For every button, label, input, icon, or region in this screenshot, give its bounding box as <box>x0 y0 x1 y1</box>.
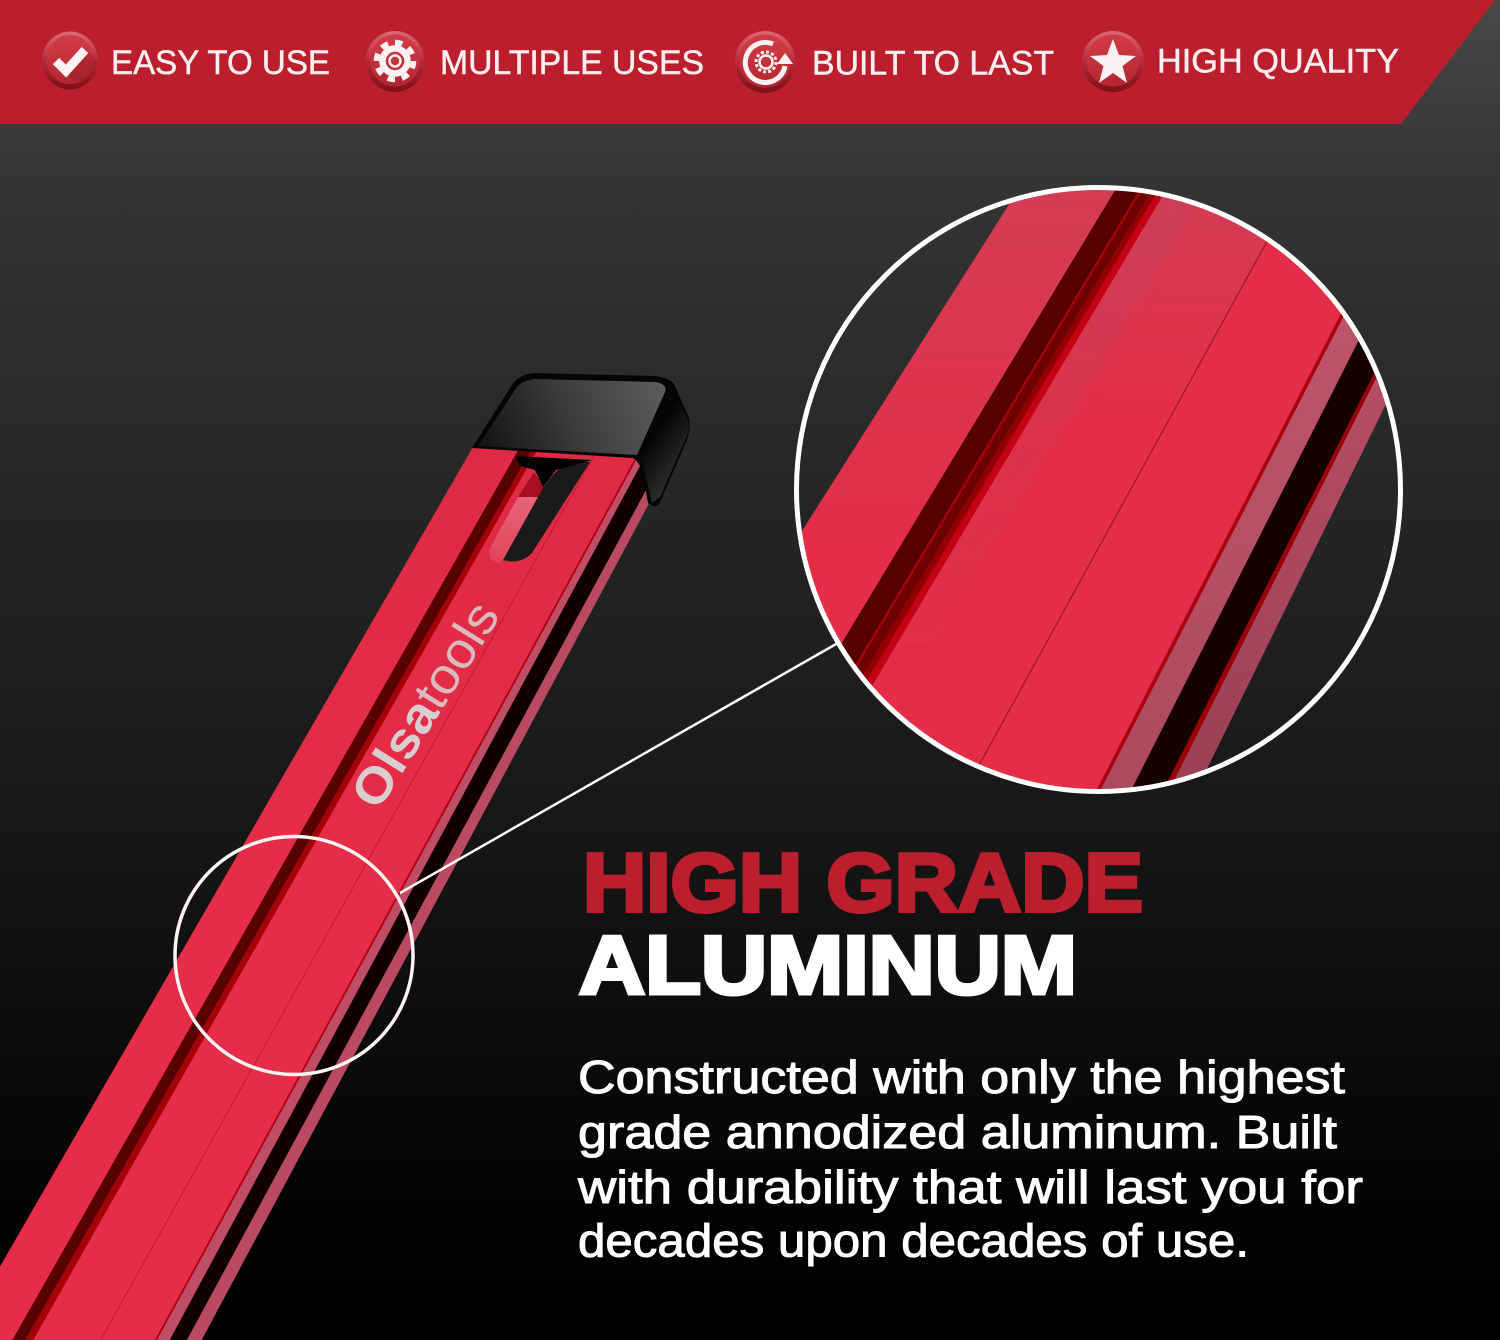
label: high quality: HIGH QUALITY <box>1157 42 1399 80</box>
label: built to last: BUILT TO LAST <box>812 44 1054 82</box>
icon: star badge <box>1082 31 1144 92</box>
body paragraph <box>577 1051 1363 1266</box>
bar main face <box>0 440 647 1340</box>
ghost slot reflection <box>489 497 538 563</box>
seam line <box>89 440 603 1340</box>
lens ring <box>796 188 1400 792</box>
icon: check badge <box>42 32 98 90</box>
small magnifier circle <box>175 836 413 1074</box>
body paragraph: decades upon decades of use. <box>578 1214 1249 1266</box>
heading <box>579 836 1143 1012</box>
bar light strip <box>146 440 654 1340</box>
body paragraph: with durability that will last you for <box>577 1161 1363 1213</box>
cap shadow <box>515 456 592 487</box>
lens contents <box>802 190 1386 789</box>
logo text: Olsatools <box>340 591 510 818</box>
label: easy to use: EASY TO USE <box>111 44 330 82</box>
heading line: aluminum: ALUMINUM <box>579 919 1077 1012</box>
black end cap <box>472 373 690 506</box>
slot upper red <box>518 472 544 497</box>
bar black channel <box>159 440 673 1340</box>
bar outer strip <box>176 440 683 1340</box>
header ribbon <box>0 0 1495 124</box>
icon: built to last badge <box>734 31 796 93</box>
product: red aluminum bar with cap <box>0 373 690 1340</box>
magnified lens panel <box>794 185 1403 794</box>
body paragraph: Constructed with only the highest <box>578 1051 1345 1103</box>
body paragraph: grade annodized aluminum. Built <box>578 1106 1337 1158</box>
slot opening <box>503 462 590 561</box>
groove <box>1 440 543 1340</box>
label: multiple uses: MULTIPLE USES <box>440 44 704 82</box>
callout connector line <box>400 644 837 893</box>
icon: gear badge <box>366 31 424 92</box>
face edge line <box>144 440 647 1340</box>
heading line: high grade: HIGH GRADE <box>583 836 1143 929</box>
